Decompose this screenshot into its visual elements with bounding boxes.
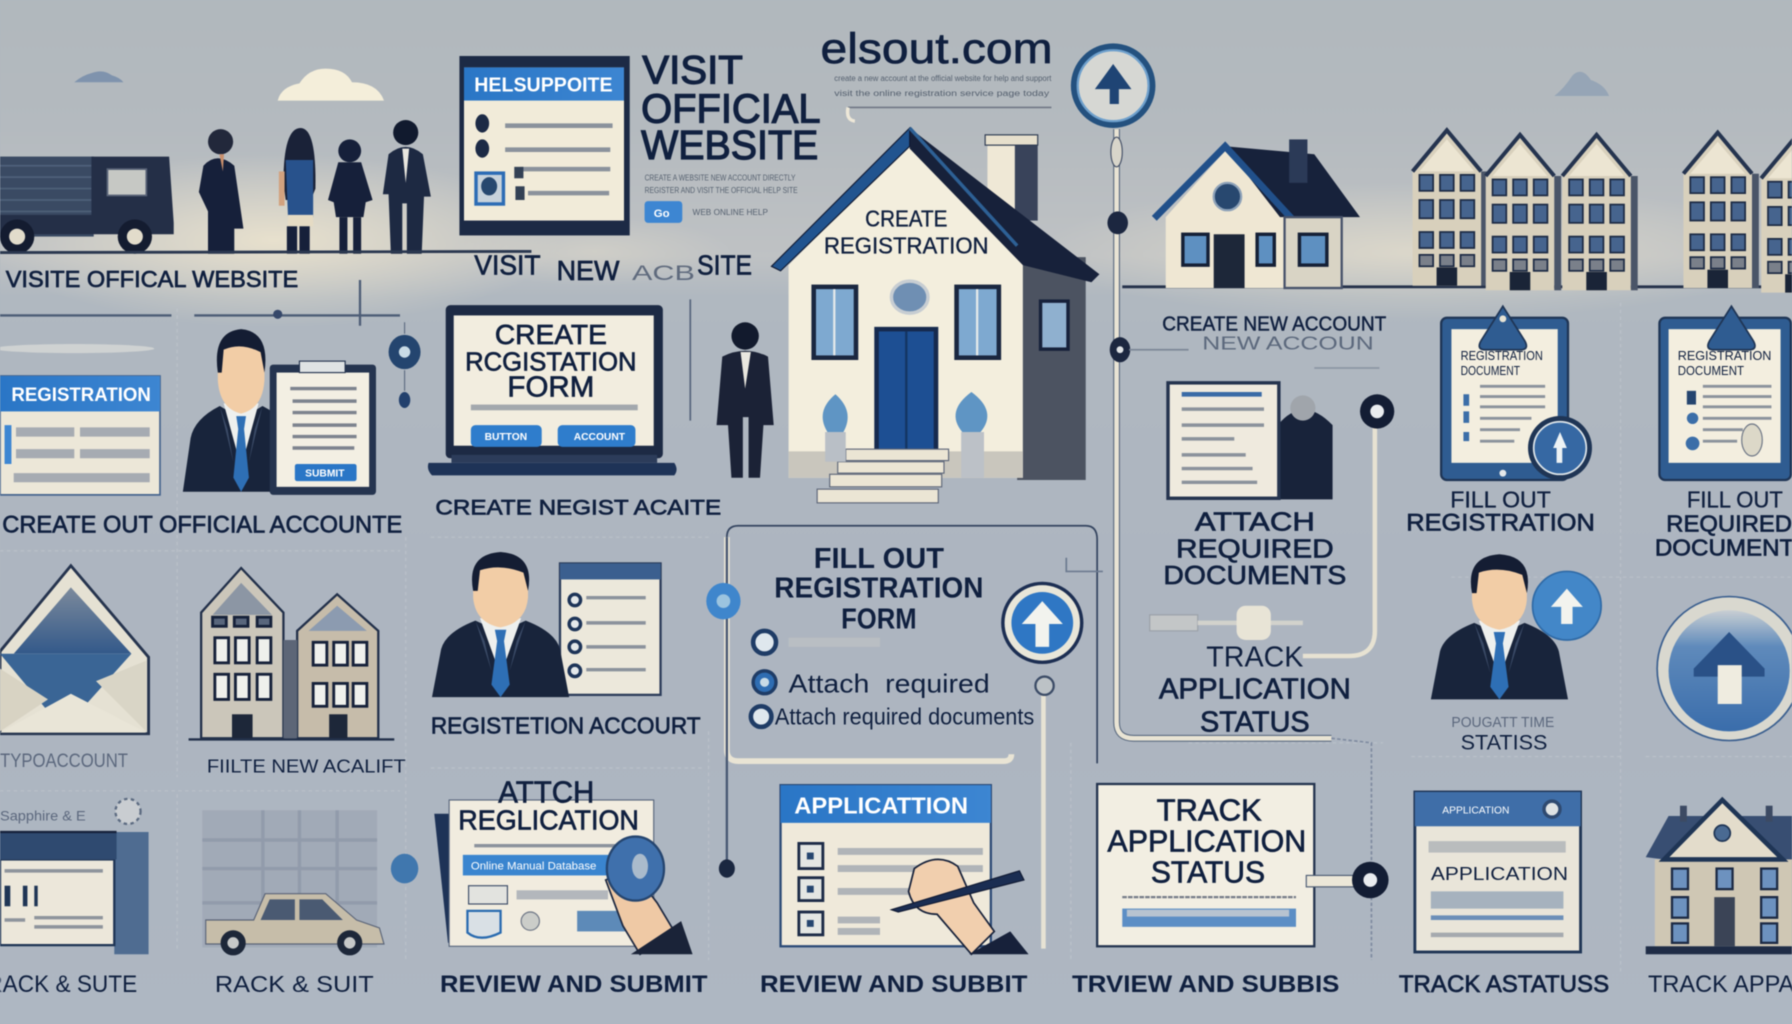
- label: track astatuss: TRACK ASTATUSS: [1399, 971, 1609, 998]
- label: attach required documents: ATTACH: [1195, 506, 1315, 536]
- website window: [459, 56, 630, 235]
- brand sub lines: visit the online registration service page today: [834, 89, 1049, 98]
- clipboard: registration 2: DOCUMENT: [1678, 364, 1744, 378]
- cloud: grey right: [1554, 72, 1609, 96]
- panel: suite window: [0, 799, 149, 954]
- connector: right of laptop: [689, 299, 691, 421]
- brand sub lines: create a new account at the official website for help and support: [834, 74, 1052, 83]
- label: attach required documents: DOCUMENTS: [1163, 560, 1346, 590]
- application window: APPLICATTION: [794, 793, 968, 819]
- pickup truck: [206, 894, 384, 955]
- laptop: BUTTON: [485, 432, 527, 443]
- attach registration document: ATTCH: [498, 774, 594, 809]
- attached document with person: [1168, 383, 1333, 499]
- cloud: cream: [278, 69, 384, 101]
- two buildings: [189, 568, 394, 739]
- door: [874, 327, 938, 449]
- laptop: [428, 305, 677, 475]
- people group: [199, 120, 431, 254]
- laptop: FORM: [507, 372, 594, 404]
- application window: [781, 785, 1029, 954]
- man with upload badge: [1431, 554, 1601, 699]
- label: fill out required document: [1655, 486, 1792, 560]
- label: create new account: NEW ACCOUN: [1202, 333, 1374, 354]
- label: track application status: [1159, 641, 1351, 738]
- ground line right: [1122, 286, 1792, 288]
- label: account faded: TYPOACCOUNT: [0, 750, 128, 772]
- pipe: [1041, 690, 1045, 949]
- small caption lines: Go: [654, 208, 670, 220]
- label: fill out required document: DOCUMENT: [1655, 534, 1792, 560]
- envelope: [0, 566, 149, 734]
- left window: [811, 285, 858, 360]
- label: create new account: [1162, 312, 1387, 354]
- label: review and submit 2: REVIEW AND SUBBIT: [760, 971, 1028, 998]
- small caption lines: [645, 174, 798, 223]
- main house: REGISTRATION: [824, 233, 989, 259]
- label: visit new acbsite: [474, 249, 752, 286]
- small caption lines: CREATE A WEBSITE NEW ACCOUNT DIRECTLY: [645, 174, 796, 183]
- main house: [771, 128, 1099, 503]
- panel: fill out registration form: Attach required: [789, 669, 990, 699]
- track status window: APPLICATION: [1442, 806, 1509, 817]
- track application box: TRACK: [1157, 793, 1262, 828]
- ground line left: [0, 251, 531, 253]
- attach registration document: Online Manual Database: [471, 861, 596, 873]
- label: attach required documents: REQUIRED: [1176, 534, 1334, 564]
- laptop: ACCOUNT: [574, 432, 626, 443]
- node: blue: [706, 583, 741, 619]
- label: status faded: [1451, 715, 1554, 755]
- right window: [954, 285, 1001, 360]
- label: fill out registration: [1406, 486, 1595, 536]
- node: small blue: [391, 854, 418, 883]
- clipboard: registration 2: [1659, 306, 1791, 480]
- clipboard: [270, 361, 376, 495]
- label: track application status: STATUS: [1200, 706, 1310, 738]
- label: attach required documents: [1163, 506, 1346, 590]
- seal icon: [1657, 597, 1792, 741]
- side window: [1039, 299, 1070, 351]
- laptop: CREATE: [495, 319, 607, 350]
- attach registration document: REGLICATION: [458, 805, 639, 836]
- label: status faded: POUGATT TIME: [1451, 715, 1554, 731]
- label: status faded: STATISS: [1461, 730, 1547, 755]
- label: trview and subbis: TRVIEW AND SUBBIS: [1072, 971, 1339, 998]
- brand sub lines: [834, 74, 1052, 121]
- clipboard: registration 1: DOCUMENT: [1461, 364, 1520, 378]
- panel: fill out registration form: FILL OUT: [814, 543, 945, 575]
- track status window: [1415, 792, 1581, 952]
- label: create new account: CREATE NEW ACCOUNT: [1162, 312, 1387, 335]
- truck: [0, 157, 174, 254]
- label: visit new acbsite: NEW: [557, 255, 620, 286]
- steps: [817, 449, 949, 503]
- planters: [823, 394, 848, 462]
- label: rack & suit: RACK & SUIT: [215, 971, 374, 997]
- track application box: APPLICATION: [1107, 823, 1306, 858]
- panel: suite window: Sapphire & E: [0, 809, 86, 824]
- panel: fill out registration form: Attach required documents: [775, 704, 1034, 730]
- brand: elsout.com: elsout.com: [821, 25, 1053, 72]
- small house: [1154, 139, 1360, 288]
- panel: fill out registration form: REGISTRATION: [774, 573, 983, 605]
- label: fill out registration: REGISTRATION: [1406, 509, 1595, 536]
- node: track connector: [1306, 862, 1389, 898]
- timeline connector: [1107, 129, 1371, 960]
- label: fill out registration: FILL OUT: [1450, 486, 1551, 512]
- clipboard: SUBMIT: [305, 469, 345, 480]
- man with checklist: [432, 552, 661, 697]
- cloud: small grey left: [74, 71, 123, 82]
- small caption lines: REGISTER AND VISIT THE OFFICIAL HELP SITE: [645, 186, 798, 195]
- house text: CREATE: [865, 205, 947, 231]
- node: lower: [719, 859, 735, 878]
- row of buildings: [1413, 128, 1792, 293]
- label: visit new acbsite: VISIT: [474, 249, 541, 280]
- label: track application status: APPLICATION: [1159, 673, 1351, 705]
- label: visite official website: VISITE OFFICAL WEBSITE: [6, 266, 298, 292]
- chimney: [985, 135, 1038, 221]
- track application box: STATUS: [1151, 854, 1265, 889]
- heading: visit official website: WEBSITE: [641, 122, 818, 168]
- track status window: APPLICATION: [1431, 863, 1568, 884]
- registration window: [0, 376, 160, 495]
- hand with pen: [891, 859, 1029, 954]
- standing man: [717, 322, 774, 478]
- man with clipboard: [183, 329, 376, 495]
- label: fill out required document: REQUIRED: [1666, 510, 1792, 536]
- label: create out official accounte: CREATE OUT OFFICIAL ACCOUNTE: [2, 512, 402, 539]
- laptop: RCGISTATION: [465, 346, 637, 376]
- registration window: REGISTRATION: [11, 384, 151, 406]
- window title: HELSUPPOITE: [474, 73, 613, 96]
- clipboard: registration 1: [1441, 306, 1592, 480]
- mansion: [1646, 800, 1792, 954]
- attach registration document: [434, 774, 693, 954]
- person 3: [328, 139, 373, 254]
- track application box: [1097, 784, 1314, 946]
- person 2: [279, 128, 316, 254]
- label: fiilte new acalift: FIILTE NEW ACALIFT: [207, 756, 406, 777]
- icon: blue up arrow: [1001, 582, 1083, 664]
- clipboard: registration 1: REGISTRATION: [1461, 349, 1543, 363]
- person 1: [199, 129, 243, 254]
- decorative connector row: [0, 280, 400, 353]
- connector nodes: [389, 322, 421, 408]
- clipboard: registration 2: REGISTRATION: [1678, 349, 1771, 363]
- panel: fill out registration form: FORM: [841, 604, 917, 636]
- icon: top arrow circle: [1071, 43, 1155, 128]
- node and connector: documents: [1303, 368, 1394, 656]
- label: registetion account: REGISTETION ACCOURT: [431, 713, 701, 739]
- label: fill out required document: FILL OUT: [1687, 486, 1783, 512]
- label: visit new acbsite: SITE: [697, 249, 752, 280]
- bottom labels: [0, 971, 1792, 998]
- faded buildings with pickup: [202, 810, 384, 955]
- heading: visit official website: VISIT: [642, 48, 743, 92]
- label: track application status: TRACK: [1206, 641, 1303, 673]
- hand with mouse: [606, 837, 693, 954]
- person 4: [383, 120, 431, 254]
- heading: visit official website: OFFICIAL: [641, 85, 821, 131]
- panel: fill out registration form: [706, 526, 1103, 949]
- heading: visit official website: [641, 48, 821, 168]
- plaque: [891, 281, 928, 313]
- bracket top right: [1066, 558, 1103, 571]
- label: visit new acbsite: ACB: [632, 260, 695, 285]
- gadget: connector plug: [1150, 606, 1303, 640]
- small caption lines: WEB ONLINE HELP: [693, 208, 768, 217]
- label: review and submit 1: REVIEW AND SUBMIT: [440, 971, 708, 998]
- label: create negist acaite: CREATE NEGIST ACAITE: [435, 494, 721, 519]
